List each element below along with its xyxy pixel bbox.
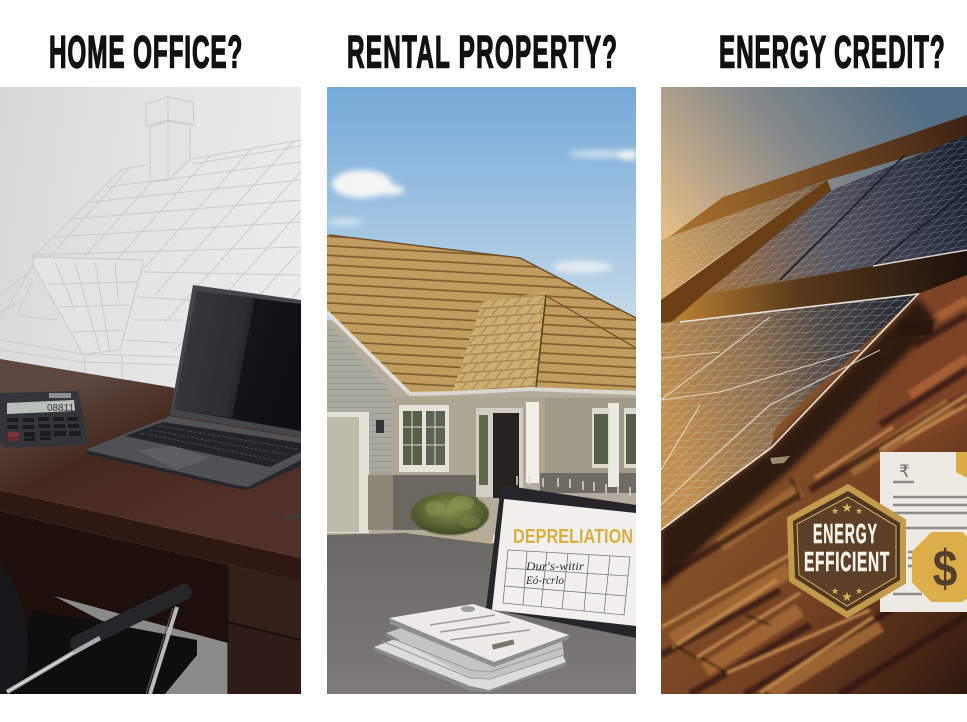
icon: laptop xyxy=(85,285,301,490)
blueprint house sketch xyxy=(0,97,301,380)
left wall siding xyxy=(327,322,392,480)
office chair xyxy=(0,563,184,694)
desk front edge xyxy=(0,490,301,582)
sky xyxy=(327,87,636,327)
wall background xyxy=(0,87,301,521)
badge stars: ★ xyxy=(841,501,853,516)
roof valley line xyxy=(548,297,636,348)
porch shade xyxy=(392,397,636,475)
stack of papers xyxy=(374,604,569,692)
porch columns xyxy=(526,402,539,483)
icon: calculator xyxy=(0,391,88,448)
badge stars: ★ xyxy=(841,590,853,605)
desk drawers xyxy=(228,565,301,694)
badge stars: ★ xyxy=(831,507,839,517)
heading: energy credit: ENERGY CREDIT? xyxy=(719,26,945,77)
chair seat xyxy=(0,610,197,694)
panel mounting bracket xyxy=(770,321,933,464)
clouds xyxy=(327,150,638,273)
gable dormer xyxy=(453,292,546,390)
roof xyxy=(327,235,636,392)
icon: dollar coin xyxy=(913,533,967,601)
heading: rental property: RENTAL PROPERTY? xyxy=(347,26,617,77)
shadow under solar panel xyxy=(661,298,938,590)
stone base xyxy=(393,475,478,530)
icon: dollar coin: $ xyxy=(933,540,957,598)
roof ridge band xyxy=(661,115,967,243)
sky xyxy=(661,87,967,327)
roof top tiles right of panel xyxy=(860,275,967,470)
gap band between upper and main panels xyxy=(661,250,967,340)
solar panel upper left xyxy=(661,180,827,300)
wall lamp xyxy=(376,420,384,433)
window left xyxy=(399,405,449,472)
badge stars xyxy=(831,501,863,605)
tax document xyxy=(880,452,967,612)
handwritten note 1: Dur's-witir xyxy=(525,559,584,573)
tax document: ₹ xyxy=(899,462,910,481)
calendar title: DEPRELIATION xyxy=(513,526,633,548)
garage door xyxy=(327,412,369,533)
calendar xyxy=(486,476,636,638)
shadow strip between panels xyxy=(661,180,832,330)
badge stars: ★ xyxy=(831,587,839,597)
desk top xyxy=(0,359,301,558)
roof tiles base xyxy=(661,250,967,694)
panel: energy credit xyxy=(661,87,967,694)
pen xyxy=(285,516,301,518)
badge text: ENERGY xyxy=(813,518,877,549)
house wall xyxy=(327,320,636,535)
handwritten note 2: Eó-rcrlo xyxy=(525,573,564,587)
front door xyxy=(476,408,523,498)
driveway xyxy=(327,533,636,694)
solar panel main xyxy=(661,294,918,530)
panel: home office xyxy=(0,87,301,694)
panel: rental property xyxy=(327,87,638,694)
desk underside xyxy=(0,511,301,694)
badge stars: ★ xyxy=(855,507,863,517)
shrub xyxy=(411,493,489,535)
badge: energy efficient xyxy=(788,485,905,617)
badge stars: ★ xyxy=(855,587,863,597)
roof tile ridges xyxy=(661,300,967,694)
roof trim xyxy=(327,312,409,393)
calculator display digits: 08811 xyxy=(47,403,74,414)
calendar grid xyxy=(503,550,630,615)
floor xyxy=(54,596,228,694)
solar panel upper main xyxy=(703,135,967,295)
badge text second line: EFFICIENT xyxy=(804,546,889,577)
heading: home office: HOME OFFICE? xyxy=(49,26,242,77)
windows right xyxy=(592,408,636,468)
